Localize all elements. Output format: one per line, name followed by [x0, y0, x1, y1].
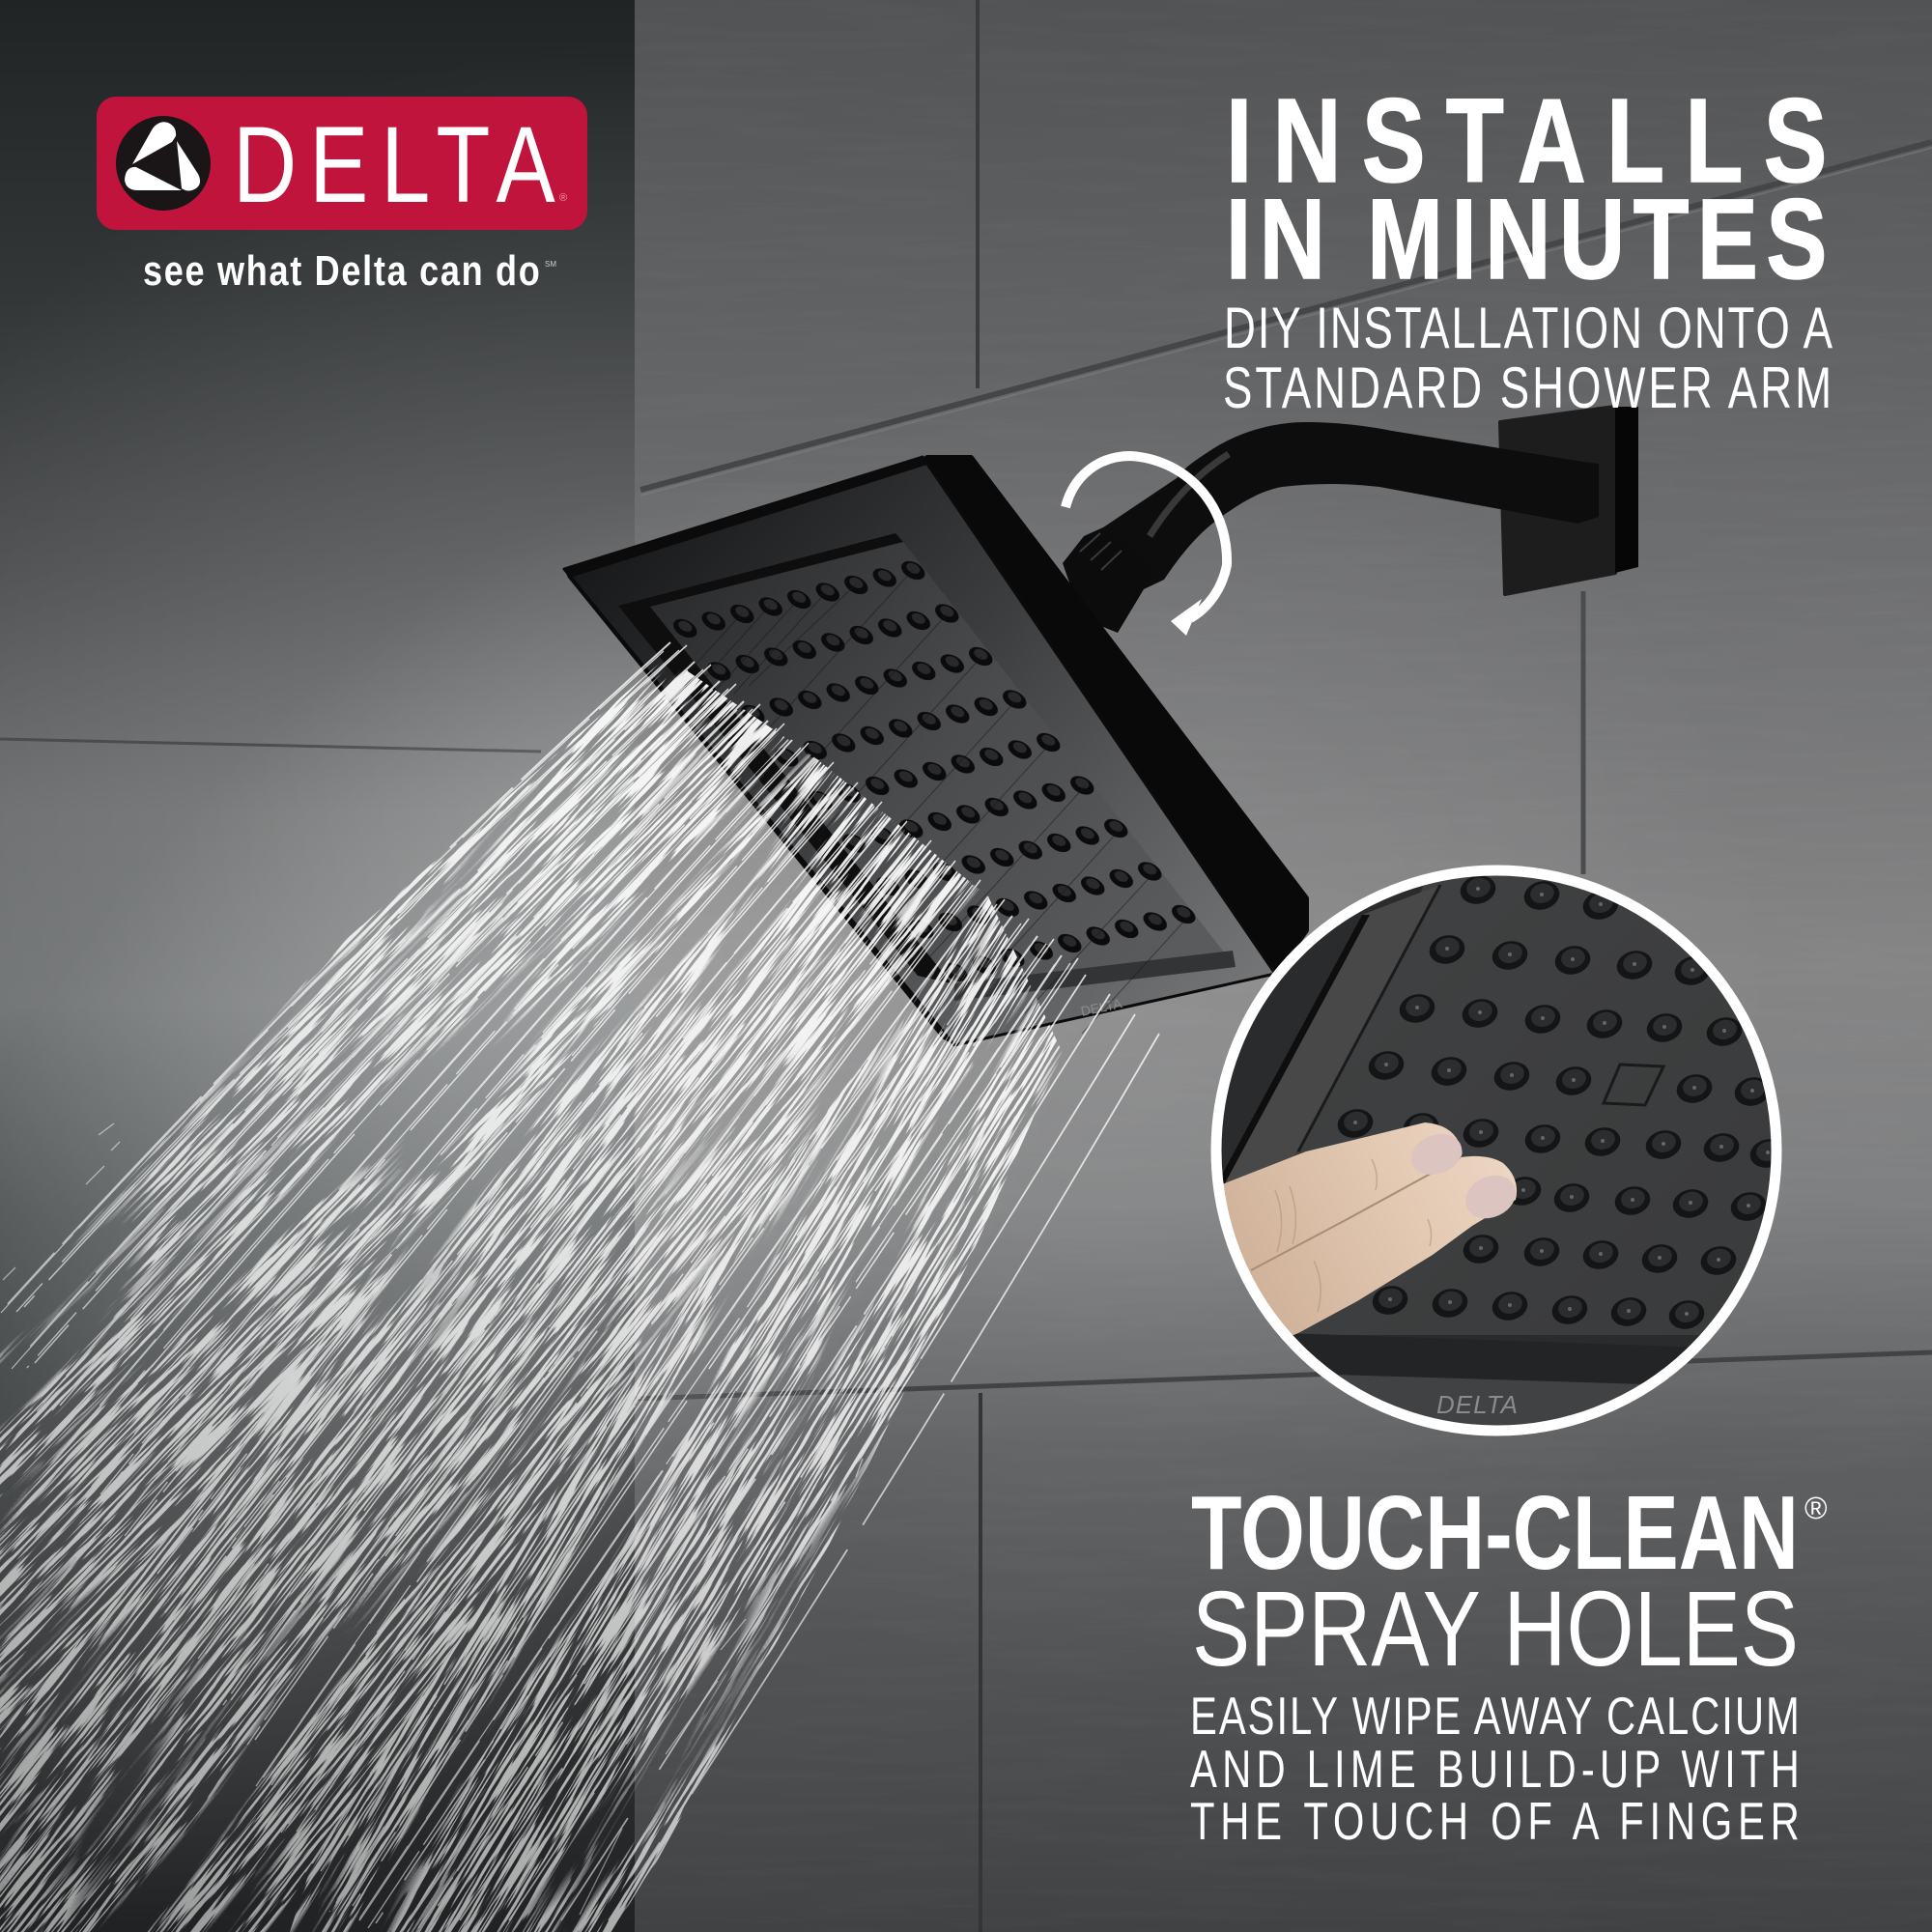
- service mark: SM: [545, 260, 556, 269]
- fingernail lower: [1459, 1168, 1522, 1226]
- wall flange: [1500, 407, 1638, 594]
- shower arm and flange: [1063, 407, 1638, 633]
- close-up plate: [1294, 875, 1771, 1335]
- logo red badge: [97, 97, 587, 230]
- lower plate strip: [954, 951, 1236, 1001]
- dark strip: [1294, 1333, 1336, 1335]
- icon: rotation arrow: [1065, 456, 1227, 636]
- description line 3: THE TOUCH OF A FINGER: [1190, 1793, 1800, 1851]
- soft light behind spray: [0, 483, 1159, 1932]
- logo triangle mark: [116, 116, 211, 211]
- head logo text: DELTA: [1079, 995, 1123, 1019]
- zoom callout: touch-clean close-up: [1183, 850, 1797, 1439]
- individual water streams: [1, 642, 1159, 1929]
- plate bevel: [1225, 887, 1437, 1183]
- heading: installs in minutes: [1223, 73, 1833, 421]
- close-up brand text: DELTA: [1436, 1390, 1518, 1419]
- heading: touch-clean spray holes: [1190, 1474, 1828, 1851]
- recess shadow: [618, 533, 952, 983]
- callout contents: [1221, 875, 1772, 1426]
- connector nut and threads: [1063, 527, 1154, 633]
- shower head: [564, 457, 1306, 1045]
- logo wordmark: DELTA: [233, 103, 555, 225]
- description line 1: DIY INSTALLATION ONTO A: [1224, 297, 1833, 361]
- head edge area: [1221, 885, 1700, 1347]
- registered mark: ®: [559, 192, 567, 204]
- close-up holes: [1335, 871, 1788, 1333]
- left gradient panel: [0, 0, 635, 1932]
- head side frame: [908, 458, 1306, 974]
- water spray: [1, 642, 1159, 1929]
- brand logo: [97, 97, 587, 295]
- head front face: [564, 457, 1275, 1045]
- headline line 1: INSTALLS: [1226, 73, 1827, 208]
- spray plate: [650, 542, 1236, 983]
- thin streams over the plate: [676, 570, 1188, 1034]
- headline line 2: IN MINUTES: [1226, 175, 1827, 302]
- water texture left wedge: [428, 1346, 441, 1359]
- description line 2: AND LIME BUILD-UP WITH: [1190, 1741, 1800, 1799]
- water texture centre wedge: [428, 1346, 441, 1359]
- headline light: SPRAY HOLES: [1192, 1570, 1799, 1689]
- description line 2: STANDARD SHOWER ARM: [1223, 356, 1832, 421]
- background: wall tiles: [635, 0, 1932, 1932]
- logo tagline: see what Delta can do: [143, 247, 540, 295]
- lower area: [1337, 1375, 1640, 1426]
- spray hole grid: [654, 545, 1215, 997]
- stray droplets: [3, 1123, 863, 1915]
- callout fill: [1216, 870, 1776, 1431]
- fingers: [1208, 1122, 1522, 1352]
- square sensor outline: [1604, 1065, 1663, 1105]
- registered mark: ®: [1804, 1491, 1828, 1525]
- fingernail upper: [1406, 1127, 1467, 1181]
- callout ring: [1216, 870, 1776, 1431]
- description line 1: EASILY WIPE AWAY CALCIUM: [1190, 1688, 1800, 1746]
- arm tube: [1103, 422, 1599, 589]
- knuckle creases: [1275, 1159, 1432, 1312]
- water texture right wedge: [428, 1346, 441, 1359]
